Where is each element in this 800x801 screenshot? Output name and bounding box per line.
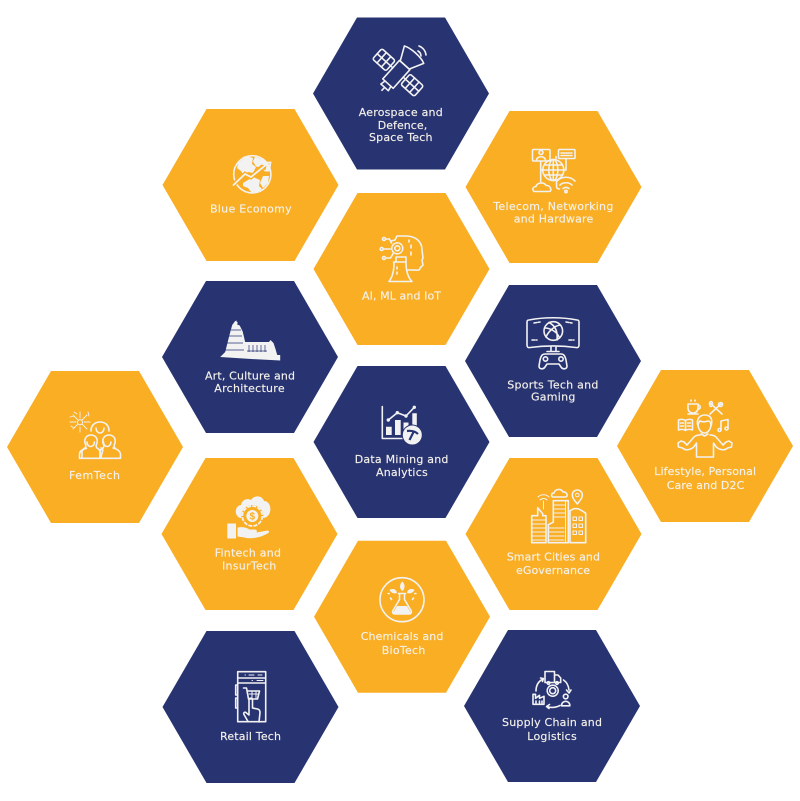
- hexagon: [617, 370, 793, 522]
- label: [355, 453, 448, 479]
- hexagon: [162, 281, 338, 433]
- label: Defence,: [378, 119, 427, 132]
- icon: flask with leaves: [380, 578, 424, 622]
- label: Architecture: [214, 382, 285, 395]
- panel: Data Mining and Analytics: [314, 366, 490, 518]
- label: eGovernance: [516, 564, 590, 577]
- icon: network and globe: [532, 150, 575, 193]
- label: Care and D2C: [667, 479, 745, 492]
- hexagon: [466, 458, 642, 610]
- panel: Telecom, Networking and Hardware: [466, 111, 642, 263]
- label: Space Tech: [369, 131, 433, 144]
- label: Smart Cities and: [507, 551, 600, 564]
- label: Fintech and: [215, 547, 281, 560]
- icon: AI head with gear: [380, 236, 423, 282]
- icon: satellite: [361, 34, 436, 109]
- label: [215, 547, 281, 573]
- panel: Lifestyle, Personal Care and D2C: [617, 370, 793, 522]
- label: AI, ML and IoT: [362, 289, 441, 302]
- panel: Smart Cities and eGovernance: [466, 458, 642, 610]
- label: [507, 551, 600, 577]
- label: Chemicals and: [361, 630, 443, 643]
- hexagon: [313, 18, 489, 170]
- label: [205, 369, 295, 395]
- panel: Aerospace and Defence, Space Tech: [313, 18, 489, 170]
- hexagon: [465, 285, 641, 437]
- icon: phone shopping cart: [236, 672, 266, 722]
- icon: globe with rising arrow: [234, 156, 271, 193]
- icon: person with hobbies: [678, 400, 732, 457]
- label: FemTech: [69, 469, 120, 482]
- label: Blue Economy: [210, 202, 292, 216]
- hexagon: [162, 631, 338, 783]
- panel: Sports Tech and Gaming: [465, 285, 641, 437]
- icon: women with neural network: [70, 412, 120, 458]
- label: Logistics: [527, 730, 577, 743]
- label: Telecom, Networking: [492, 200, 613, 213]
- label: [502, 716, 602, 743]
- label: Sports Tech and: [507, 378, 598, 391]
- panel: Chemicals and BioTech: [314, 541, 490, 693]
- icon: monitor with basketball and gamepad: [527, 318, 579, 369]
- hexagon: [314, 193, 490, 345]
- panel: AI, ML and IoT: [314, 193, 490, 345]
- icon: cloud, coin and hand: [227, 496, 270, 538]
- label: Art, Culture and: [205, 369, 295, 382]
- icon: supply chain cycle: [533, 672, 571, 708]
- label: Gaming: [531, 391, 575, 404]
- icon: chart with pickaxe: [382, 406, 422, 445]
- hexagon: [466, 111, 642, 263]
- label: InsurTech: [222, 560, 276, 573]
- label: [654, 465, 756, 492]
- hexagon: [162, 458, 338, 610]
- label: Lifestyle, Personal: [654, 465, 756, 478]
- panel: FemTech: [7, 371, 183, 523]
- panel: Fintech and InsurTech: [162, 458, 338, 610]
- label: BioTech: [382, 644, 425, 657]
- label: Aerospace and: [359, 106, 443, 119]
- hexagon: [7, 371, 183, 523]
- label: Analytics: [376, 466, 428, 479]
- icon: temple: [220, 320, 280, 360]
- label: Retail Tech: [220, 730, 281, 743]
- label: and Hardware: [514, 213, 594, 226]
- hexagon: [464, 630, 640, 782]
- icon: cloud, coin and hand: $: [250, 512, 256, 522]
- panel: Art, Culture and Architecture: [162, 281, 338, 433]
- panel: Blue Economy: [162, 109, 338, 261]
- hexagon: [314, 541, 490, 693]
- label: [359, 106, 443, 144]
- panel: Retail Tech: [162, 631, 338, 783]
- label: Supply Chain and: [502, 716, 602, 729]
- hexagon: [314, 366, 490, 518]
- hexagon: [162, 109, 338, 261]
- label: Data Mining and: [355, 453, 448, 466]
- label: [361, 630, 443, 657]
- panel: Supply Chain and Logistics: [464, 630, 640, 782]
- label: [492, 200, 613, 226]
- label: [507, 378, 598, 404]
- icon: smart city: [532, 489, 586, 543]
